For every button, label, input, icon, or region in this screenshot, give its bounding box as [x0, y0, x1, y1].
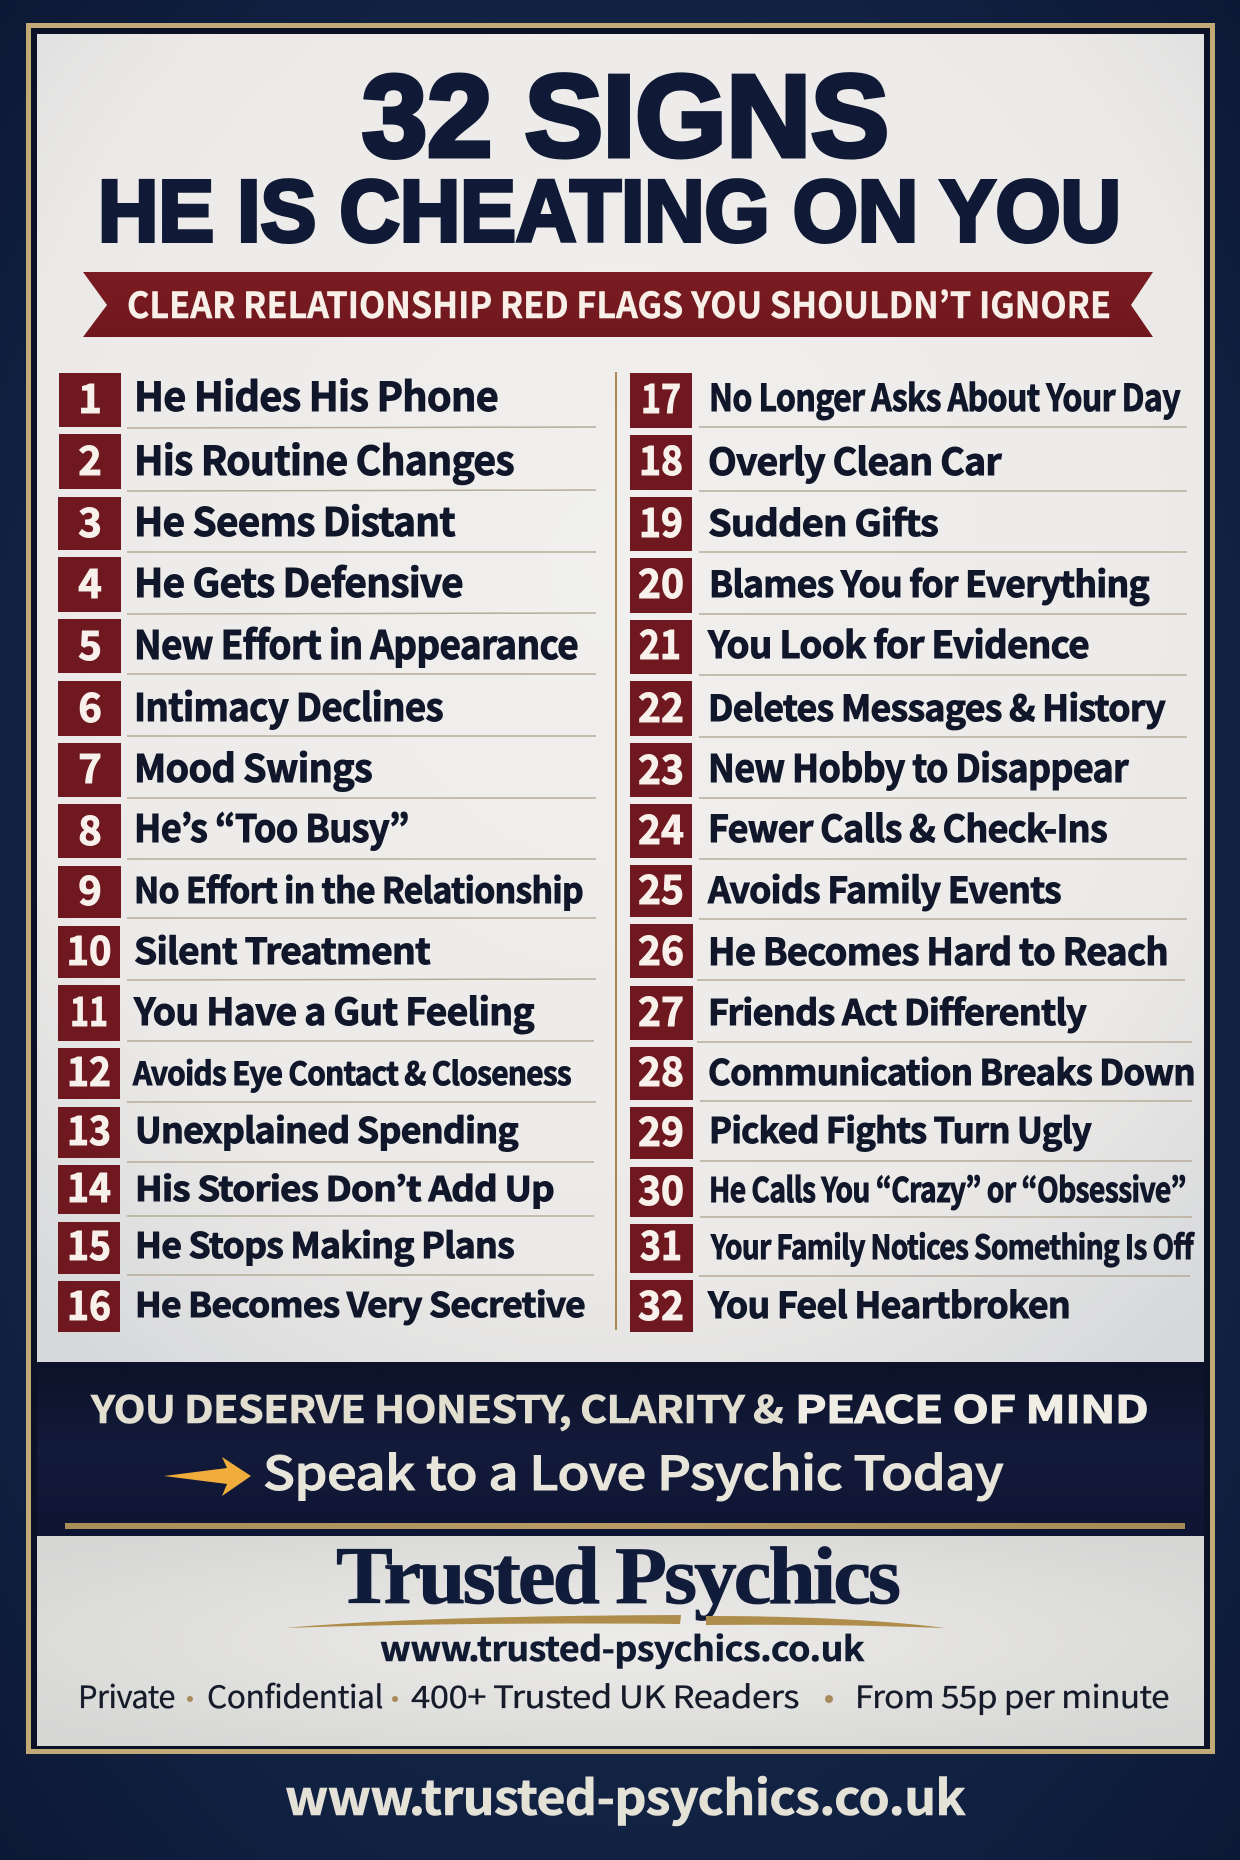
sign 11: You Have a Gut Feeling: [133, 982, 535, 1036]
gold divider bar: [65, 1523, 1185, 1529]
sign 1: He Hides His Phone: [134, 365, 498, 423]
website url: www.trusted-psychics.co.uk: [380, 1622, 865, 1671]
sign 8: He’s “Too Busy”: [134, 798, 409, 853]
sign 22: Deletes Messages & History: [708, 680, 1166, 732]
sign 15: He Stops Making Plans: [135, 1218, 514, 1269]
trust points: Private: [78, 1672, 175, 1717]
panel: call to action band: [37, 1362, 1204, 1536]
sign 16: He Becomes Very Secretive: [135, 1278, 585, 1327]
ribbon text: CLEAR RELATIONSHIP RED FLAGS YOU SHOULDN’T IGNORE: [127, 277, 1111, 329]
sign 19: Sudden Gifts: [708, 495, 938, 547]
sign 8: [58, 798, 409, 858]
sign 20: 20: [638, 552, 684, 610]
sign 21: You Look for Evidence: [707, 615, 1089, 669]
sign 2: 2: [78, 429, 102, 487]
sign 30: [630, 1159, 1186, 1217]
right column of signs: [630, 367, 1195, 1332]
sign 26: He Becomes Hard to Reach: [708, 922, 1168, 976]
sign 31: [630, 1214, 1195, 1273]
sign 23: 23: [638, 738, 684, 796]
panel: brand: [37, 1530, 1204, 1746]
title: 32 signs: 32 SIGNS: [362, 51, 889, 181]
sign 3: He Seems Distant: [134, 492, 455, 548]
sign 12: [58, 1040, 571, 1099]
panel: signs list paper: [37, 34, 1204, 1362]
headline: you deserve honesty: [90, 1379, 1148, 1434]
sign 29: Picked Fights Turn Ugly: [709, 1103, 1092, 1154]
trust points: From 55p per minute: [855, 1672, 1169, 1717]
sign 15: 15: [67, 1214, 111, 1272]
sign 5: New Effort in Appearance: [134, 615, 578, 671]
sign 17: No Longer Asks About Your Day: [709, 368, 1180, 422]
sign 12: 12: [67, 1040, 111, 1098]
sign 14: 14: [67, 1156, 111, 1214]
sign 23: New Hobby to Disappear: [708, 738, 1129, 793]
sign 19: 19: [639, 491, 683, 549]
trust points: Confidential: [207, 1672, 383, 1717]
sign 7: Mood Swings: [134, 738, 372, 793]
sign 13: 13: [67, 1099, 111, 1157]
icon: gold arrow: [164, 1457, 251, 1496]
sign 28: 28: [638, 1040, 684, 1098]
sign 6: 6: [78, 676, 102, 734]
sign 14: His Stories Don’t Add Up: [135, 1162, 554, 1211]
sign 9: 9: [78, 859, 102, 917]
sign 26: 26: [638, 919, 684, 977]
headline: you deserve honesty: YOU DESERVE HONESTY, CLARITY &: [90, 1379, 784, 1434]
sign 3: 3: [78, 491, 102, 549]
call to action text: Speak to a Love Psychic Today: [263, 1435, 1003, 1504]
gold swoosh: [285, 1615, 945, 1628]
sign 28: Communication Breaks Down: [708, 1045, 1195, 1096]
sign 18: Overly Clean Car: [708, 432, 1003, 486]
sign 10: [58, 919, 431, 978]
sign 25: Avoids Family Events: [707, 862, 1061, 914]
sign 27: Friends Act Differently: [708, 985, 1087, 1036]
sign 20: Blames You for Everything: [709, 556, 1149, 608]
sign 18: 18: [639, 429, 683, 487]
sign 8: 8: [78, 799, 102, 857]
sign 24: Fewer Calls & Check-Ins: [708, 799, 1107, 853]
sign 32: You Feel Heartbroken: [707, 1277, 1070, 1329]
footer url: www.trusted-psychics.co.uk: [285, 1759, 966, 1829]
title: he is cheating on you: HE IS CHEATING ON YOU: [98, 163, 1121, 260]
sign 4: He Gets Defensive: [134, 553, 463, 609]
sign 27: [630, 980, 1087, 1040]
sign 31: 31: [640, 1214, 682, 1272]
sign 10: Silent Treatment: [134, 923, 431, 975]
sign 21: 21: [639, 613, 681, 671]
sign 25: 25: [638, 858, 684, 916]
sign 17: [630, 367, 1180, 428]
sign 6: Intimacy Declines: [134, 677, 443, 732]
sign 10: 10: [66, 919, 112, 977]
sign 11: 11: [70, 980, 108, 1038]
sign 30: 30: [638, 1159, 684, 1217]
sign 9: No Effort in the Relationship: [134, 863, 583, 914]
sign 5: 5: [78, 614, 102, 672]
sign 15: [58, 1214, 514, 1274]
brand name: Trusted Psychics: [336, 1530, 899, 1621]
sign 14: [58, 1156, 554, 1214]
sign 27: 27: [638, 980, 684, 1038]
sign 7: [58, 737, 372, 797]
sign 22: 22: [638, 676, 684, 734]
sign 12: Avoids Eye Contact & Closeness: [132, 1049, 571, 1095]
sign 18: [630, 429, 1003, 490]
sign 13: Unexplained Spending: [135, 1103, 519, 1154]
sign 4: 4: [78, 552, 102, 610]
sign 2: His Routine Changes: [134, 429, 514, 487]
trust points: [78, 1672, 1169, 1717]
sign 19: [630, 491, 938, 551]
sign 32: 32: [638, 1274, 684, 1332]
sign 16: 16: [67, 1274, 111, 1332]
sign 17: 17: [641, 367, 681, 425]
sign 7: 7: [78, 737, 102, 795]
left column of signs: [58, 365, 585, 1332]
sign 29: 29: [638, 1100, 684, 1158]
sign 1: 1: [78, 367, 102, 425]
trust points: 400+ Trusted UK Readers: [411, 1672, 799, 1717]
ribbon banner: [83, 272, 1153, 337]
sign 16: [58, 1274, 585, 1332]
headline: you deserve honesty: PEACE OF MIND: [795, 1379, 1148, 1434]
sign 24: 24: [638, 798, 684, 856]
